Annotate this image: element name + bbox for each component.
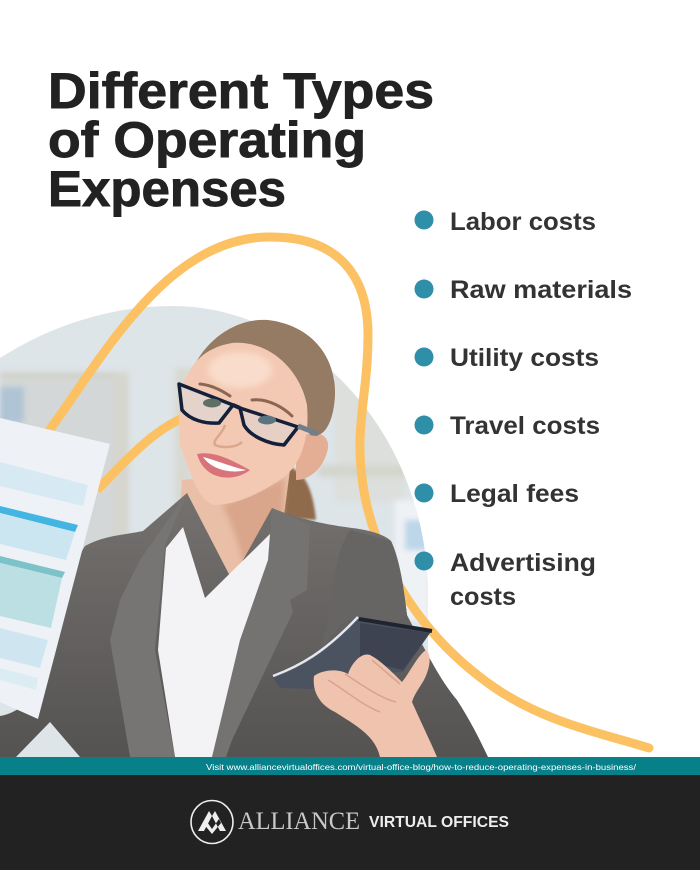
title: Different Types: [48, 63, 434, 119]
item: Legal fees: Legal fees: [450, 480, 579, 508]
jacket lapel right: [212, 508, 310, 757]
title: [48, 63, 434, 217]
jacket lapel left: [110, 529, 175, 757]
logo mark: [191, 800, 233, 844]
item: Labor costs: Labor costs: [450, 208, 596, 236]
glasses: [179, 384, 318, 445]
item: Raw materials: Raw materials: [450, 276, 632, 304]
photo background: blurred office: [0, 300, 430, 760]
title: Expenses: [48, 161, 286, 217]
decorative yellow curve: [48, 237, 649, 748]
ponytail: [284, 467, 318, 522]
face: [179, 343, 308, 505]
item: Advertising costs: Advertising: [450, 549, 596, 577]
finger creases: [328, 660, 400, 712]
item: Utility costs: Utility costs: [450, 344, 599, 372]
tagline: VIRTUAL OFFICES: [369, 814, 509, 831]
mouth: [197, 453, 250, 478]
title: of Operating: [48, 112, 366, 168]
neck shadow: [222, 478, 285, 570]
source link bar: Visit www.alliancevirtualoffices.com/virtual-office-blog/how-to-reduce-operating-expenses-in-business/: [206, 762, 637, 772]
hair back: [194, 320, 335, 436]
footer band: [0, 775, 700, 870]
report sheet: [0, 418, 110, 719]
neck: [180, 472, 290, 574]
shirt: [158, 527, 272, 757]
eyebrows: [200, 384, 292, 416]
ear: [296, 433, 328, 480]
sleeve shading: [348, 530, 407, 614]
source link bar: [0, 757, 700, 775]
calculator: [273, 617, 432, 689]
nose: [214, 425, 242, 447]
jacket: [0, 493, 488, 757]
forehead highlight: [208, 352, 272, 388]
logo: Alliance Virtual Offices: [191, 800, 509, 844]
blue detail behind arm: [352, 728, 378, 757]
photo: businesswoman with report and calculator: [0, 320, 488, 757]
bullet list: [414, 208, 632, 611]
hand and forearm: [314, 650, 437, 757]
item: Travel costs: Travel costs: [450, 412, 600, 440]
item: Advertising costs: costs: [450, 583, 516, 611]
item: Advertising costs: [414, 549, 596, 611]
wordmark: ALLIANCE: [238, 808, 360, 835]
